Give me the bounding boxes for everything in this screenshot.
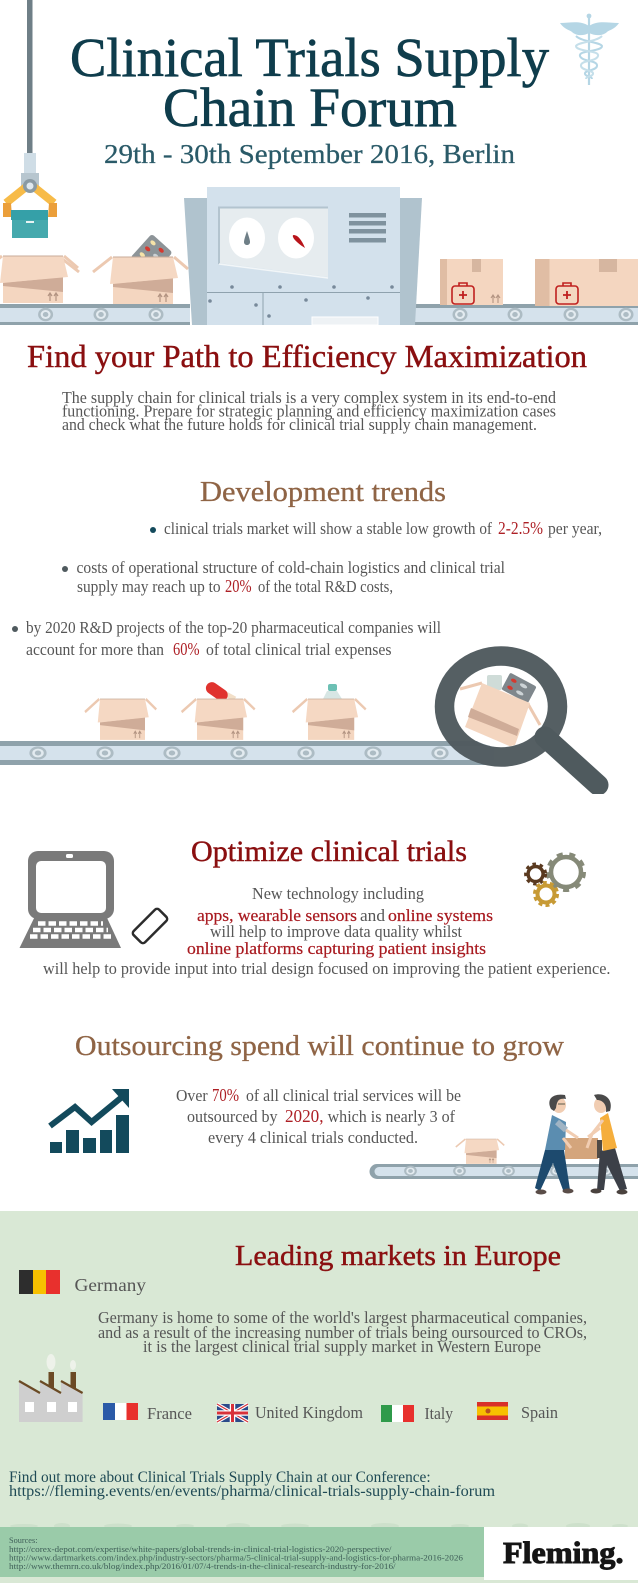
machine	[184, 187, 422, 325]
label: France: France	[147, 1404, 192, 1423]
text: Germany description: Germany is home to some of the world's largest pharmaceutical companies,	[98, 1308, 587, 1327]
text: outsourcing facts: outsourced by	[187, 1107, 278, 1126]
text: outsourcing facts: of all clinical trial services will be	[246, 1086, 461, 1105]
text: outsourcing facts: 2020,	[285, 1106, 324, 1126]
text: Germany description: it is the largest clinical trial supply market in Western Europe	[143, 1337, 541, 1356]
text: new technology: New technology including	[252, 884, 424, 903]
flag: Italy	[381, 1405, 414, 1422]
bullet: cold-chain costs: of the total R&D costs,	[258, 577, 393, 596]
bullet: R&D projects	[12, 618, 441, 659]
text: new technology: online systems	[388, 906, 493, 925]
heading: outsourcing spend: Outsourcing spend will continue to grow	[75, 1030, 564, 1062]
text: new technology: will help to improve data quality whilst	[210, 922, 462, 941]
intro text: The supply chain for clinical trials is a very complex system in its end-to-end	[62, 388, 557, 407]
box: open box with blister pack	[93, 257, 188, 304]
bullet: R&D projects: account for more than	[26, 640, 164, 659]
text: new technology: apps, wearable sensors	[197, 906, 357, 925]
logo: Fleming: Fleming.	[503, 1535, 624, 1570]
footer silhouette	[10, 1523, 628, 1529]
flag: France	[103, 1403, 138, 1420]
text: outsourcing facts	[176, 1085, 461, 1147]
subtitle: date and place: 29th - 30th September 2016, Berlin	[104, 139, 516, 169]
label: Italy: Italy	[424, 1404, 454, 1423]
heading: find your path: Find your Path to Efficiency Maximization	[27, 338, 587, 374]
box: box with capsule	[182, 699, 255, 740]
text: conference link	[9, 1469, 496, 1500]
flag: Spain	[477, 1402, 508, 1420]
icon: caduceus	[560, 14, 619, 85]
panel: leading markets	[0, 1211, 638, 1583]
bullet: cold-chain costs	[62, 558, 505, 596]
footer: sources band	[0, 1527, 484, 1577]
title: Clinical Trials Supply	[70, 27, 549, 88]
conveyor: trends	[0, 741, 494, 765]
text: sources: http://corex-depot.com/expertise/white-papers/global-trends-in-clinical-trial-logistics-2020-perspective/	[9, 1544, 392, 1554]
logo: Fleming	[484, 1527, 638, 1580]
text: sources: http://www.dartmarkets.com/index.php/industry-sectors/pharma/5-clinical-trial-supply-and-logistics-for-pharma-2016-2026	[9, 1552, 463, 1562]
intro text: and check what the future holds for clinical trial supply chain management.	[62, 415, 537, 434]
person: left with glasses	[535, 1095, 578, 1194]
conveyor: hero	[0, 304, 638, 325]
bullet: R&D projects: of total clinical trial expenses	[206, 640, 392, 659]
box: medical box small	[440, 259, 503, 305]
heading: optimize clinical trials: Optimize clinical trials	[191, 835, 467, 868]
text: new technology: online platforms capturing patient insights	[187, 939, 486, 958]
bullet: R&D projects: by 2020 R&D projects of the top-20 pharmaceutical companies will	[26, 618, 441, 637]
icon: red capsule	[204, 680, 235, 703]
title: Chain Forum	[163, 77, 457, 138]
icon: blister pack in box	[130, 234, 173, 276]
title	[70, 27, 549, 138]
label: United Kingdom: United Kingdom	[255, 1403, 363, 1422]
bullet: R&D projects: 60%	[173, 639, 200, 659]
text: sources	[9, 1535, 463, 1571]
icon: magnifying glass	[444, 656, 610, 804]
box: small open box	[456, 1139, 504, 1164]
bullet: cold-chain costs: costs of operational structure of cold-chain logistics and clinical trial	[76, 558, 505, 577]
text: conference link: Find out more about Clinical Trials Supply Chain at our Conference:	[9, 1469, 431, 1486]
icon: laptop	[20, 851, 121, 948]
person: right in yellow shirt	[587, 1094, 628, 1194]
box: open box under crane	[0, 256, 79, 303]
intro text: functioning. Prepare for strategic planning and efficiency maximization cases	[62, 402, 556, 420]
text: outsourcing facts: Over	[176, 1086, 208, 1105]
bullet: market growth: clinical trials market will show a stable low growth of	[164, 519, 492, 538]
icon: growth chart	[50, 1089, 129, 1153]
label: Spain: Spain	[521, 1403, 558, 1422]
flag: United Kingdom	[217, 1404, 248, 1422]
conveyor: outsourcing	[370, 1164, 638, 1179]
text: sources: http://www.themrn.co.uk/blog/index.php/2016/01/07/4-trends-in-the-clinical-research-industry-for-2016/	[9, 1561, 396, 1571]
text: conference link: https://fleming.events/en/events/pharma/clinical-trials-supply-chain-forum	[9, 1483, 496, 1500]
icon: crane claw holding box	[3, 0, 57, 238]
box: carried box	[565, 1138, 602, 1159]
icon: factory	[19, 1354, 83, 1422]
vent grill	[349, 213, 386, 242]
intro text	[62, 388, 557, 434]
text: new technology: and	[360, 906, 386, 925]
heading: leading markets in Europe: Leading markets in Europe	[235, 1240, 561, 1272]
heading: development trends: Development trends	[200, 476, 446, 508]
text: outsourcing facts: 70%	[212, 1085, 239, 1105]
illustration: two people carrying box	[535, 1094, 628, 1194]
dial: red needle	[278, 218, 314, 258]
bullet: cold-chain costs: supply may reach up to	[77, 577, 221, 596]
box: medical box large	[535, 259, 638, 306]
icon: smartphone	[132, 908, 168, 944]
bullet: market growth: 2-2.5%	[498, 518, 543, 538]
box: empty box	[85, 699, 156, 740]
dial: grey needle	[229, 218, 265, 258]
flag: Germany	[19, 1270, 60, 1294]
text: new technology: will help to provide input into trial design focused on improving the patient experience.	[43, 959, 610, 978]
icon: bottle	[323, 684, 342, 699]
label: Germany: Germany	[74, 1275, 146, 1295]
box: box with bottle	[293, 699, 366, 740]
text: Germany description: and as a result of the increasing number of trials being oursourced to CROs,	[98, 1323, 587, 1342]
icon: gears	[526, 854, 584, 906]
bullet: cold-chain costs: 20%	[225, 576, 252, 596]
text: outsourcing facts: every 4 clinical trials conducted.	[208, 1128, 418, 1147]
text: outsourcing facts: which is nearly 3 of	[328, 1107, 455, 1126]
text: Germany description	[98, 1308, 587, 1356]
text: new technology	[43, 884, 610, 978]
text: sources: Sources:	[9, 1535, 38, 1545]
bullet: market growth: per year,	[548, 519, 602, 538]
